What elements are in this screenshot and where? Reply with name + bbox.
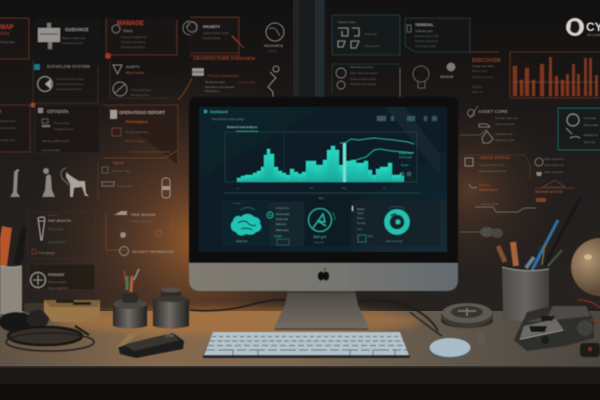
panel: check status: Current level of unit — [479, 163, 504, 167]
panel: map — [0, 18, 29, 59]
panel: priority: PRIORITY — [203, 25, 221, 29]
panel: left column notes: Usage note — [0, 138, 16, 142]
panel: check status: CHECK STATUS — [479, 155, 510, 160]
smoke puff — [480, 227, 503, 238]
panel: signal: Active ports — [117, 184, 133, 188]
panel: manage: Process update list — [121, 35, 147, 39]
legend list: Time — [357, 229, 363, 231]
panel: teal terminal — [405, 18, 470, 52]
disc reel — [441, 303, 493, 328]
panel: teal terminal: Connection state — [415, 44, 436, 48]
panel: asset core: Assigned unit — [495, 132, 513, 136]
icon: teal cloud: Cloud use — [236, 240, 248, 243]
monitor stand — [274, 290, 369, 330]
panel: city data: Latest update — [42, 148, 61, 152]
icon: dog — [61, 168, 89, 197]
icon: donut — [386, 206, 407, 243]
panel: teal terminal: TERMINAL — [415, 23, 434, 27]
panel: process list: Allocation and transfer — [205, 85, 235, 89]
chart: teal area bars: Jan — [236, 188, 240, 190]
icon: gauge: Rate — [319, 197, 324, 200]
text block: discover: Usage rate table — [472, 64, 494, 68]
panel: pay booth: PAY BOOTH — [48, 218, 71, 223]
screen reflection — [385, 107, 440, 175]
right wall infographic panels — [400, 18, 600, 238]
panel: manage — [106, 18, 177, 55]
panel: pay booth — [28, 212, 95, 258]
panel: data review — [535, 157, 564, 176]
text block: guidance: Network access — [62, 41, 84, 45]
icon: robotic arm — [268, 66, 279, 97]
panel: city data: Usage by hour — [54, 127, 74, 131]
panel: operations report: Review summary — [125, 130, 149, 134]
dashboard header: Home Reports Usage Settings — [212, 118, 245, 121]
panel: asset core — [460, 106, 518, 143]
panel: pay booth: Entry count — [48, 227, 63, 231]
text block: discover — [470, 52, 501, 94]
panel: priority: Status: Online check — [203, 31, 229, 35]
dashboard header: Dashboard — [210, 110, 228, 114]
icon: apple logo — [318, 268, 329, 281]
icons: white figures — [10, 168, 55, 197]
panel: asset core: Records on file — [495, 138, 515, 142]
panel: data flow: Outbound usage log — [56, 82, 83, 86]
panel: data review: Data review list — [544, 157, 564, 161]
panel: manage: Review and share — [121, 45, 145, 49]
panel: teal diagram: Signal routes — [338, 20, 356, 24]
panel: data flow: Access level check — [56, 87, 82, 91]
panel: map: MAP — [0, 25, 13, 31]
chart title — [227, 125, 258, 132]
wooden box — [44, 300, 100, 322]
panel: fire badge — [106, 211, 174, 256]
panel: asset core: Storage base rate — [495, 116, 518, 120]
panel: asset core: Device load list — [495, 122, 515, 126]
panel: left column notes — [0, 105, 30, 152]
icon: sensor — [440, 62, 456, 79]
icon: teal cloud: Storage — [233, 202, 241, 205]
panel: process list: Workload entry — [205, 80, 226, 84]
panel: left column notes: Signal feed — [0, 119, 15, 123]
pen cup right — [498, 198, 580, 321]
panel: alerts: Risk index — [126, 71, 144, 75]
panel: process list: Control input — [238, 80, 255, 84]
chart: teal area bars: May — [342, 188, 347, 190]
chart: teal area bars: Stream — [401, 164, 409, 167]
icon: gauge: 360 gm — [313, 234, 327, 239]
legend list: Signal — [357, 213, 364, 215]
chart: teal area bars: Active load — [399, 152, 413, 155]
legend list: Note — [368, 235, 374, 238]
panel: city data: CITYDATA — [47, 109, 69, 114]
icon: resource globe: Tracking — [267, 49, 277, 53]
chart: teal area bars: Mar — [310, 187, 314, 190]
panel: fire badge: SECURITY INFORMATION — [132, 250, 174, 254]
panel: manage: Status — [123, 29, 133, 33]
panel: process list: Process infrastructure — [208, 74, 239, 78]
logo — [566, 18, 600, 37]
status list: Update — [274, 235, 283, 238]
panel: teal diagram — [332, 15, 400, 55]
icon: gauge — [308, 197, 335, 244]
panel: data review: Open ticket info — [544, 163, 564, 167]
jar dark — [153, 288, 189, 328]
panel: operations report: OPERATIONS REPORT — [119, 110, 165, 115]
legend list — [352, 206, 374, 242]
icon: donut: Element map — [386, 239, 403, 243]
text block: guidance — [35, 18, 101, 53]
pen cup left — [0, 226, 26, 314]
text block: discover: Report ratio — [472, 69, 488, 73]
panel: fire badge: FIRE BADGE — [131, 212, 156, 217]
panel: teal terminal: Session output 12 — [415, 39, 438, 43]
panel: signal — [98, 152, 170, 200]
text block: discover: Rate 14 — [472, 90, 483, 94]
panel: check status: Manual — [479, 183, 490, 187]
icon: gauge: Daily total — [314, 241, 324, 244]
panel: manage: MANAGE — [117, 21, 144, 27]
panel: process list: Monitoring — [205, 89, 219, 93]
panel: map: OPS — [0, 31, 10, 36]
panel: left column notes: Channel list — [0, 126, 16, 130]
panel: check status: Expected return time — [479, 169, 506, 173]
panel: alerts: Review notice — [131, 93, 150, 97]
panel: repair notice: REPAIR NOTICE — [535, 190, 563, 194]
panel: data flow: Inbound stream data — [56, 77, 84, 81]
icon: resource globe — [264, 23, 284, 53]
legend list: Report — [357, 217, 364, 220]
chart: teal area bars: Peak usage — [399, 156, 413, 159]
panel: teal log: Data feed log entry — [350, 65, 374, 69]
status list: Patch status — [276, 229, 289, 232]
panel: teal diagram: Queue time — [365, 44, 380, 48]
panel: data flow — [30, 60, 98, 108]
status list: Service state — [276, 213, 290, 216]
panel: data flow: DATAFLOW SYSTEM — [47, 64, 90, 69]
panel: alerts: Threshold level — [131, 88, 152, 92]
panel: teal terminal: Monitor queue 188 — [415, 34, 439, 38]
panel: teal log — [332, 64, 400, 94]
panel: primary — [28, 264, 95, 290]
panel: teal network — [558, 108, 600, 150]
panel: fire badge: Safety check list — [131, 219, 153, 223]
heading: red band: ARCHITECTURE OVERVIEW — [193, 56, 256, 61]
panel: city data — [35, 105, 100, 153]
panel: operations report: Performance — [126, 120, 148, 124]
chart: red bar chart — [510, 52, 600, 98]
heading: red band — [190, 53, 256, 61]
panel: signal: Signal — [113, 161, 124, 165]
dashboard screen — [199, 107, 447, 252]
panel: operations report — [103, 105, 178, 165]
panel: pay booth: Station — [48, 213, 58, 217]
panel: alerts: ALERTS — [126, 65, 140, 69]
panel: teal diagram: Path load — [365, 32, 377, 36]
panel: teal network: Route data — [584, 123, 599, 127]
icon: teal cloud — [231, 202, 261, 243]
chart title: Network load analysis — [227, 125, 258, 129]
panel: teal network: Backup on — [584, 133, 598, 137]
panel: teal network: Link state — [584, 116, 597, 120]
headphones — [0, 303, 94, 351]
cables — [190, 300, 442, 336]
keyboard — [203, 332, 410, 358]
text block: guidance: GUIDANCE — [65, 27, 88, 32]
status list: Check list — [276, 206, 289, 210]
text block: discover: Output — [472, 85, 482, 89]
desk — [0, 307, 600, 400]
panel: pay booth: Fuel gauge — [38, 251, 55, 255]
text block: discover: Graph summary — [472, 75, 494, 79]
panel: signal: Network map — [112, 169, 130, 173]
panel: teal log: Pending node update — [350, 82, 377, 86]
panel: manage: Control log entries — [121, 40, 146, 44]
status list — [267, 206, 290, 245]
status list: Data sync — [276, 223, 287, 226]
phone — [116, 333, 184, 358]
panel: city data: Sensor logs — [54, 121, 70, 125]
panel: primary: Service notes — [48, 280, 67, 284]
chart: teal area bars: Jul — [383, 188, 386, 190]
panel: left column notes: I — [0, 109, 1, 114]
panel: check status: Maintenance — [479, 188, 499, 192]
status list: Active node — [276, 218, 289, 221]
panel: pay booth: Approved list — [48, 240, 66, 244]
lamp globe — [566, 238, 600, 298]
legend list: System — [357, 208, 365, 211]
jar with wires — [113, 269, 147, 328]
chart: teal area bars — [225, 132, 417, 190]
panel: priority — [187, 17, 244, 56]
panel: priority: Expand detail — [203, 36, 220, 40]
panel: primary: Open requests — [48, 286, 68, 290]
icon: resource globe: RESOURCE — [264, 44, 284, 48]
icon: sensor: SENSOR — [440, 75, 454, 79]
panel: asset core: ASSET CORE — [478, 109, 508, 114]
panel: primary: PRIMARY — [48, 273, 65, 277]
panel: operations report: Monthly output — [125, 139, 145, 143]
panel: process list — [178, 68, 255, 100]
text block: guidance: Signal output rate — [62, 36, 86, 40]
panel: teal log: Active session check — [350, 77, 377, 81]
panel: teal log: Note: Area use stream — [350, 71, 378, 75]
panel: repair notice — [460, 180, 575, 232]
icon: cylinder — [162, 178, 170, 198]
icon: head outline — [400, 66, 429, 98]
toy car — [514, 306, 594, 351]
panel: check status — [464, 155, 530, 192]
legend list: Records — [357, 222, 366, 225]
panel: data review: Team schedule — [544, 170, 564, 174]
left wall infographic panels — [0, 18, 197, 290]
gadget with red wires — [578, 300, 600, 357]
dashboard header — [204, 110, 437, 121]
panel: repair notice: Service route — [481, 202, 499, 206]
monitor — [189, 97, 458, 291]
text block: discover: DISCOVER — [472, 58, 501, 64]
icon: resource dial — [105, 21, 197, 59]
dashboard panels — [222, 200, 440, 246]
panel: teal terminal: Software task — [415, 29, 433, 33]
panel: map: Route data — [0, 40, 15, 44]
mouse — [429, 333, 485, 360]
panel: alerts — [110, 62, 170, 98]
top centre wall panels — [178, 15, 400, 100]
panel: teal network: Sync log — [584, 140, 595, 144]
panel: city data: Weekly traffic record — [42, 139, 70, 143]
